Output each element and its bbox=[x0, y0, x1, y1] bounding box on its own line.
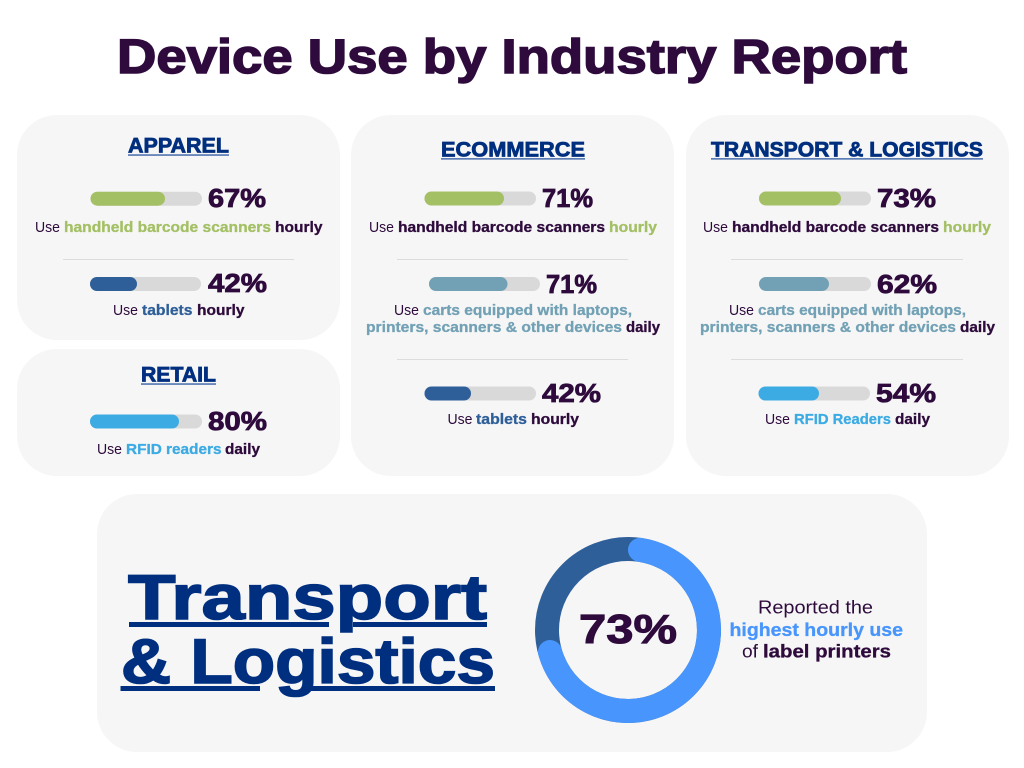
metric: RFID readers 80%: RFID readers bbox=[126, 442, 222, 458]
metric: RFID readers 54%: daily bbox=[895, 412, 930, 428]
metric: carts 71%: 71% bbox=[546, 271, 597, 299]
metric: RFID readers 80%: Use bbox=[97, 442, 122, 458]
heading: apparel: APPAREL bbox=[128, 134, 229, 158]
metric: carts 71%: printers, scanners & other devices bbox=[366, 320, 622, 336]
metric: RFID readers 54%: Use bbox=[765, 412, 790, 428]
metric: handheld scanners 71%: 71% bbox=[542, 185, 593, 213]
metric: tablets 42%: Use bbox=[448, 412, 472, 428]
metric: handheld scanners 73%: hourly bbox=[943, 220, 991, 236]
metric: tablets 42%: hourly bbox=[531, 412, 579, 428]
big heading: transport and logistics: Transport bbox=[128, 563, 487, 633]
metric: handheld scanners 73%: 73% bbox=[877, 185, 936, 213]
metric: handheld scanners 73% bbox=[703, 185, 991, 236]
panel: ecommerce bbox=[351, 115, 674, 476]
big heading: transport and logistics: & Logistics bbox=[121, 627, 495, 697]
metric: handheld scanners 73%: Use bbox=[703, 220, 728, 236]
metric: carts 62%: daily bbox=[960, 320, 995, 336]
callout text bbox=[730, 598, 903, 662]
metric: handheld scanners 71%: Use bbox=[369, 220, 394, 236]
metric: handheld scanners 67% bbox=[35, 185, 322, 236]
metric: carts 71%: carts equipped with laptops, bbox=[423, 303, 632, 319]
metric: tablets 42%: tablets bbox=[476, 412, 527, 428]
callout text: Reported the bbox=[758, 598, 873, 618]
metric: RFID readers 80% bbox=[90, 408, 267, 458]
metric: carts 71%: daily bbox=[626, 320, 660, 336]
metric: RFID readers 54%: 54% bbox=[876, 380, 936, 408]
callout text: label printers bbox=[763, 642, 891, 662]
metric: carts 71%: Use bbox=[394, 303, 419, 319]
callout text: highest hourly use bbox=[730, 620, 903, 640]
metric: carts 62%: Use bbox=[729, 303, 754, 319]
metric: tablets 42% bbox=[90, 270, 267, 319]
panel: retail bbox=[17, 349, 340, 476]
metric: RFID readers 80%: 80% bbox=[208, 408, 267, 436]
metric: handheld scanners 67%: 67% bbox=[208, 185, 266, 213]
heading: ecommerce: ECOMMERCE bbox=[441, 138, 585, 162]
metric: carts 62%: printers, scanners & other devices bbox=[700, 320, 956, 336]
metric: handheld scanners 67%: handheld barcode scanners bbox=[64, 220, 271, 236]
metric: RFID readers 54% bbox=[758, 380, 936, 428]
callout text: of bbox=[742, 642, 759, 662]
metric: tablets 42%: 42% bbox=[542, 380, 601, 408]
metric: carts 62% bbox=[700, 271, 995, 336]
metric: tablets 42%: 42% bbox=[208, 270, 267, 298]
metric: tablets 42%: Use bbox=[113, 303, 138, 319]
metric: tablets 42% bbox=[424, 380, 601, 428]
big heading: transport and logistics bbox=[120, 563, 495, 697]
metric: handheld scanners 71% bbox=[369, 185, 657, 236]
panel: apparel bbox=[17, 115, 340, 340]
metric: RFID readers 54%: RFID Readers bbox=[794, 412, 891, 428]
metric: handheld scanners 67%: hourly bbox=[275, 220, 322, 236]
metric: carts 71% bbox=[366, 271, 660, 336]
panel: highlight bbox=[97, 494, 927, 752]
panel: transport and logistics bbox=[686, 115, 1009, 476]
metric: tablets 42%: tablets bbox=[142, 303, 192, 319]
metric: handheld scanners 71%: hourly bbox=[609, 220, 657, 236]
heading: transport and logistics: TRANSPORT & LOGISTICS bbox=[711, 138, 983, 162]
metric: carts 62%: carts equipped with laptops, bbox=[758, 303, 966, 319]
title: Device Use by Industry Report bbox=[117, 31, 907, 84]
heading: retail: RETAIL bbox=[141, 364, 216, 386]
metric: handheld scanners 73%: handheld barcode scanners bbox=[732, 220, 939, 236]
metric: tablets 42%: hourly bbox=[197, 303, 244, 319]
metric: handheld scanners 71%: handheld barcode scanners bbox=[398, 220, 605, 236]
metric: handheld scanners 67%: Use bbox=[35, 220, 60, 236]
donut chart: 73%: 73% bbox=[579, 606, 677, 652]
metric: RFID readers 80%: daily bbox=[225, 442, 260, 458]
donut chart: 73% bbox=[547, 549, 709, 711]
metric: carts 62%: 62% bbox=[877, 271, 937, 299]
